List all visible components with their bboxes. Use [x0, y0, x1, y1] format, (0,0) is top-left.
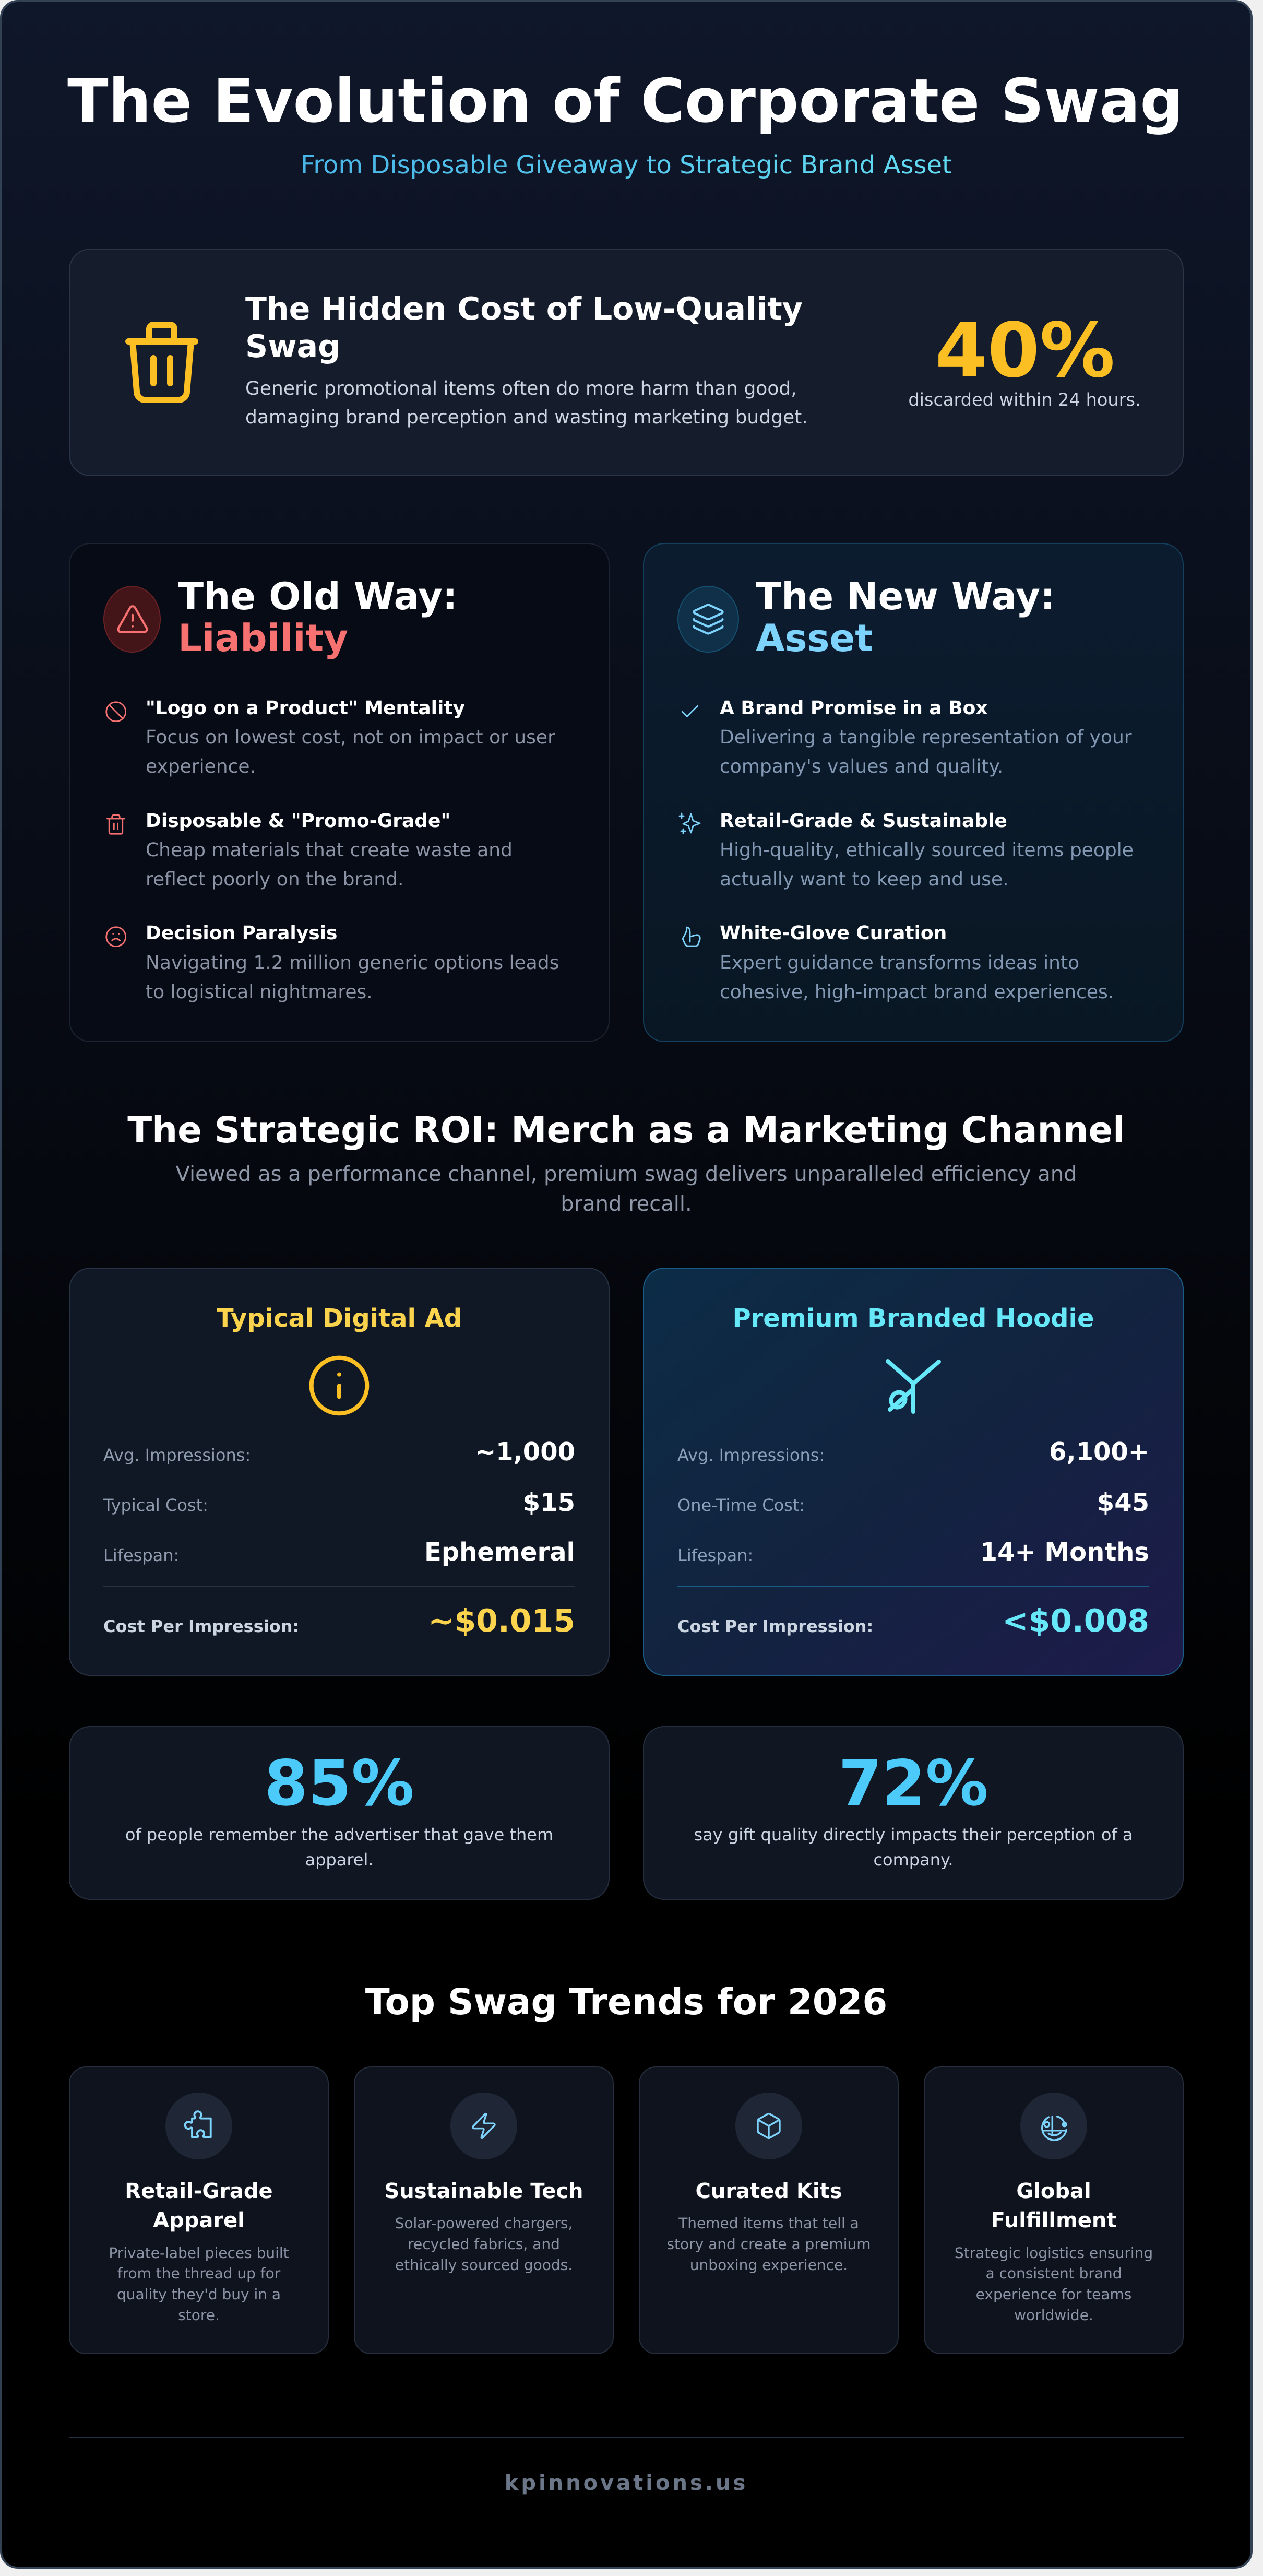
- metrics: [677, 1437, 1149, 1639]
- panel: global fulfillment: Fulfillment: [991, 2208, 1117, 2232]
- item 3: cohesive, high-impact brand experiences.: [720, 982, 1114, 1003]
- stat: 40%: 40%: [935, 306, 1115, 394]
- metrics: Ephemeral: [424, 1538, 575, 1567]
- panel: retail-grade apparel: Retail-Grade: [125, 2179, 273, 2203]
- icon: warning: [104, 586, 160, 652]
- description: damaging brand perception and wasting marketing budget.: [245, 407, 808, 428]
- panel: retail-grade apparel: [69, 2067, 328, 2354]
- panel: old way: [69, 543, 609, 1042]
- heading: The New Way:: [756, 574, 1055, 618]
- panel: stat 85%: apparel.: [305, 1850, 374, 1870]
- metrics: $45: [1097, 1488, 1149, 1517]
- item 3: Expert guidance transforms ideas into: [720, 952, 1079, 974]
- panel: stat 85%: [69, 1727, 609, 1899]
- panel: premium hoodie: [644, 1268, 1183, 1675]
- panel: curated kits: [639, 2067, 898, 2354]
- panel: retail-grade apparel: store.: [178, 2307, 220, 2324]
- subtitle: From Disposable Giveaway to Strategic Brand Asset: [301, 150, 952, 180]
- panel: typical digital ad: [69, 1268, 609, 1675]
- icon: hoodie: [888, 1361, 939, 1412]
- panel: stat 72%: 72%: [838, 1747, 988, 1820]
- item 2: Disposable & "Promo-Grade": [146, 810, 450, 832]
- panel: sustainable tech: [354, 2067, 613, 2354]
- metrics: [103, 1437, 575, 1639]
- item 1: "Logo on a Product" Mentality: [146, 698, 465, 719]
- item 1: Delivering a tangible representation of your: [720, 727, 1132, 748]
- panel: global fulfillment: experience for teams: [976, 2286, 1131, 2303]
- icon: globe: [1042, 2117, 1066, 2140]
- title: The Evolution of Corporate Swag: [67, 66, 1183, 136]
- panel: stat 72%: company.: [873, 1850, 954, 1870]
- item 3: Navigating 1.2 million generic options leads: [146, 952, 559, 974]
- panel: retail-grade apparel: quality they'd buy in a: [117, 2286, 281, 2303]
- metrics: <$0.008: [1002, 1603, 1149, 1639]
- metrics: One-Time Cost:: [677, 1495, 805, 1515]
- icon: layers: [678, 586, 738, 652]
- panel: sustainable tech: Solar-powered chargers,: [395, 2215, 573, 2232]
- panel: retail-grade apparel: Private-label pieces built: [109, 2244, 289, 2262]
- item 1: [682, 698, 1132, 777]
- metrics: Cost Per Impression:: [677, 1616, 873, 1636]
- metrics: Lifespan:: [103, 1545, 179, 1565]
- item 2: actually want to keep and use.: [720, 869, 1009, 890]
- section heading: strategic ROI: The Strategic ROI: Merch as a Marketing Channel: [127, 1109, 1125, 1151]
- panel: stat 72%: say gift quality directly impacts their perception of a: [694, 1825, 1133, 1845]
- item 3: to logistical nightmares.: [146, 982, 373, 1003]
- item 2: Cheap materials that create waste and: [146, 840, 513, 861]
- icon: box: [758, 2114, 780, 2138]
- panel: stat 72%: [644, 1727, 1183, 1899]
- panel: curated kits: story and create a premium: [666, 2236, 871, 2253]
- panel: sustainable tech: recycled fabrics, and: [408, 2236, 560, 2253]
- heading: Typical Digital Ad: [217, 1304, 462, 1333]
- heading: Liability: [178, 616, 348, 660]
- icon: info: [312, 1358, 367, 1413]
- description: Generic promotional items often do more harm than good,: [245, 378, 797, 399]
- panel: stat 85%: 85%: [264, 1747, 414, 1820]
- item 2: [680, 810, 1134, 890]
- panel: global fulfillment: Strategic logistics ensuring: [955, 2244, 1153, 2262]
- metrics: Lifespan:: [677, 1545, 753, 1565]
- icon: bolt: [473, 2114, 495, 2138]
- panel: curated kits: Curated Kits: [695, 2179, 842, 2203]
- section intro: brand recall.: [561, 1192, 692, 1216]
- metrics: $15: [523, 1488, 575, 1517]
- item 1: A Brand Promise in a Box: [720, 698, 988, 719]
- metrics: Cost Per Impression:: [103, 1616, 299, 1636]
- panel: global fulfillment: [924, 2067, 1183, 2354]
- stat caption: discarded within 24 hours.: [908, 389, 1141, 410]
- heading: Asset: [756, 616, 873, 660]
- metrics: Typical Cost:: [103, 1495, 208, 1515]
- item 1: company's values and quality.: [720, 756, 1003, 777]
- footer: kpinnovations.us: [505, 2471, 748, 2495]
- panel: sustainable tech: Sustainable Tech: [384, 2179, 583, 2203]
- panel: global fulfillment: a consistent brand: [985, 2265, 1122, 2282]
- metrics: 14+ Months: [980, 1538, 1149, 1567]
- panel: global fulfillment: worldwide.: [1014, 2307, 1093, 2324]
- panel: retail-grade apparel: Apparel: [153, 2208, 245, 2232]
- header: [67, 66, 1183, 180]
- item 3: [683, 923, 1114, 1003]
- item 3: [106, 923, 559, 1003]
- item 3: White-Glove Curation: [720, 923, 947, 944]
- metrics: ~$0.015: [428, 1603, 575, 1639]
- panel: sustainable tech: ethically sourced goods.: [395, 2256, 573, 2274]
- item 2: High-quality, ethically sourced items people: [720, 840, 1134, 861]
- panel: curated kits: unboxing experience.: [690, 2256, 848, 2274]
- item 1: experience.: [146, 756, 256, 777]
- panel: hidden cost: [69, 249, 1183, 476]
- panel: new way: [644, 543, 1183, 1042]
- panel: stat 85%: of people remember the advertiser that gave them: [125, 1825, 553, 1845]
- icon: puzzle: [185, 2111, 211, 2137]
- panel: retail-grade apparel: from the thread up for: [117, 2265, 281, 2282]
- item 2: [107, 810, 513, 890]
- metrics: ~1,000: [475, 1437, 575, 1467]
- item 3: Decision Paralysis: [146, 923, 337, 944]
- item 1: Focus on lowest cost, not on impact or user: [146, 727, 555, 748]
- heading: The Hidden Cost of Low-Quality: [245, 291, 803, 327]
- item 2: Retail-Grade & Sustainable: [720, 810, 1007, 832]
- panel: curated kits: Themed items that tell a: [678, 2215, 859, 2232]
- heading: Swag: [245, 328, 340, 365]
- panel: global fulfillment: Global: [1016, 2179, 1091, 2203]
- metrics: Avg. Impressions:: [103, 1445, 251, 1465]
- section heading: strategic ROI: [127, 1109, 1125, 1216]
- metrics: Avg. Impressions:: [677, 1445, 825, 1465]
- metrics: 6,100+: [1049, 1437, 1149, 1467]
- heading: The Old Way:: [178, 574, 458, 618]
- item 1: [106, 698, 555, 777]
- section intro: Viewed as a performance channel, premium swag delivers unparalleled efficiency and: [175, 1162, 1077, 1186]
- heading: Premium Branded Hoodie: [732, 1304, 1094, 1333]
- icon: trash: [128, 325, 195, 400]
- section heading: trends: Top Swag Trends for 2026: [365, 1981, 887, 2023]
- item 2: reflect poorly on the brand.: [146, 869, 403, 890]
